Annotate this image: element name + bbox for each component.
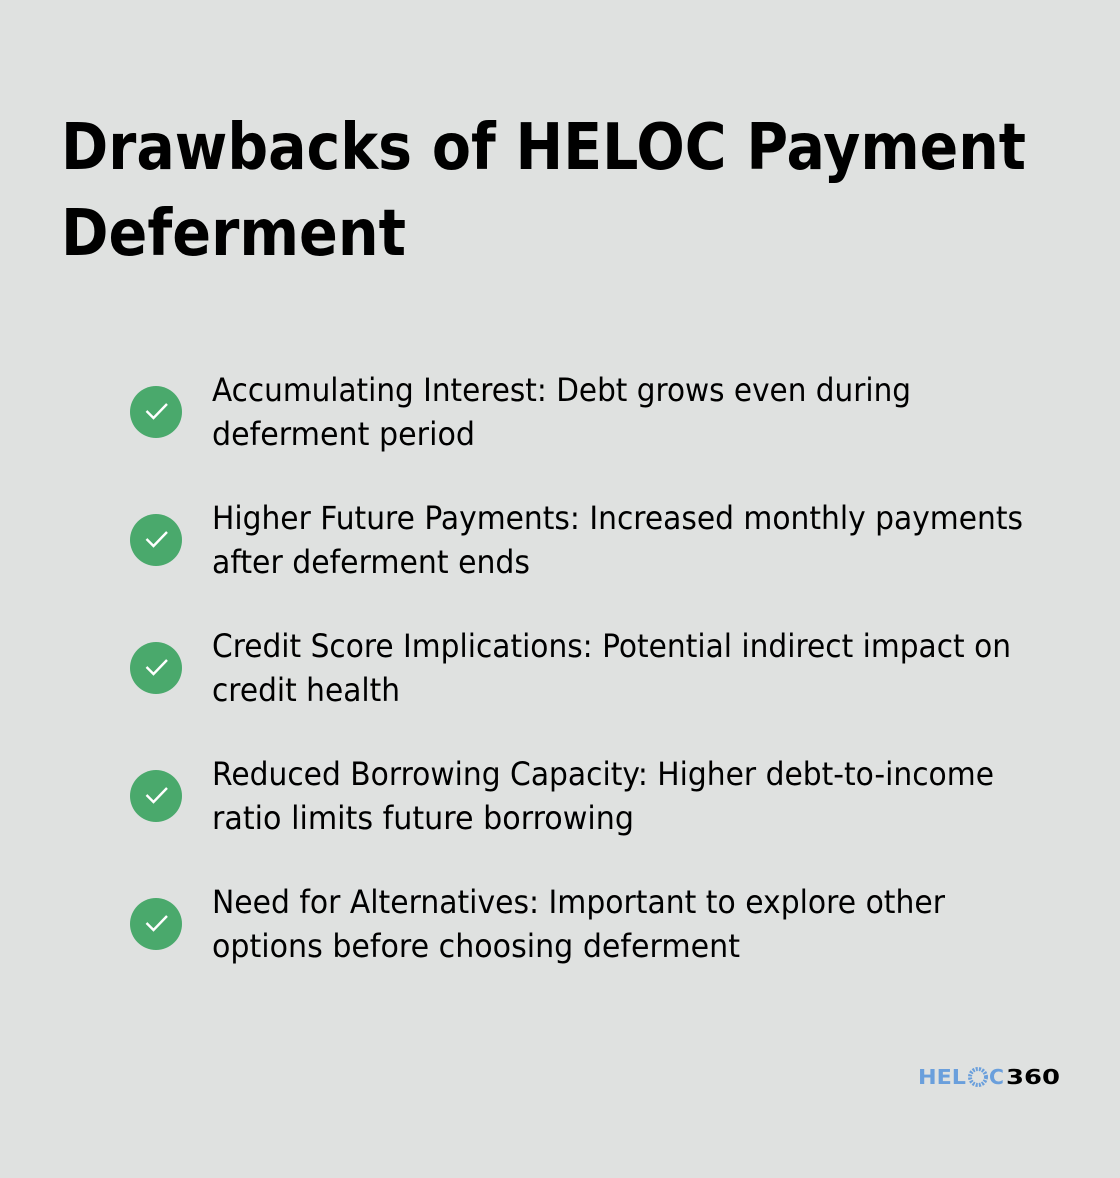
title [61, 111, 1026, 271]
item: accumulating interest [130, 371, 911, 453]
item: credit score implications [130, 627, 1011, 709]
text: need for alternatives [212, 883, 946, 965]
item: higher future payments [130, 499, 1023, 581]
text: higher future payments [212, 499, 1023, 581]
text: reduced borrowing capacity: Reduced Borrowing Capacity: Higher debt-to-income [212, 755, 994, 793]
text: credit score implications: credit health [212, 671, 400, 709]
logo: HELOC360: HEL [918, 1065, 966, 1089]
text: higher future payments: after deferment ends [212, 543, 530, 581]
text: need for alternatives: options before choosing deferment [212, 927, 740, 965]
text: credit score implications: Credit Score Implications: Potential indirect impact on [212, 627, 1011, 665]
icon: check badge [130, 514, 182, 566]
text: reduced borrowing capacity: ratio limits future borrowing [212, 799, 634, 837]
icon: check badge [130, 642, 182, 694]
text: accumulating interest: Accumulating Interest: Debt grows even during [212, 371, 911, 409]
text: accumulating interest [212, 371, 911, 453]
text: need for alternatives: Need for Alternatives: Important to explore other [212, 883, 946, 921]
icon: check badge [130, 898, 182, 950]
logo: HELOC360: C [989, 1065, 1004, 1089]
item: reduced borrowing capacity [130, 755, 994, 837]
title: Deferment [61, 197, 406, 271]
title: Drawbacks of HELOC Payment [61, 111, 1026, 185]
list of drawbacks [130, 371, 1023, 965]
text: higher future payments: Higher Future Payments: Increased monthly payments [212, 499, 1023, 537]
icon: swirl letter O [970, 1069, 986, 1085]
item: need for alternatives [130, 883, 946, 965]
logo: HELOC360 [918, 1065, 1060, 1089]
text: accumulating interest: deferment period [212, 415, 475, 453]
text: credit score implications [212, 627, 1011, 709]
text: reduced borrowing capacity [212, 755, 994, 837]
logo: HELOC360: 360 [1006, 1065, 1060, 1089]
icon: check badge [130, 386, 182, 438]
icon: check badge [130, 770, 182, 822]
